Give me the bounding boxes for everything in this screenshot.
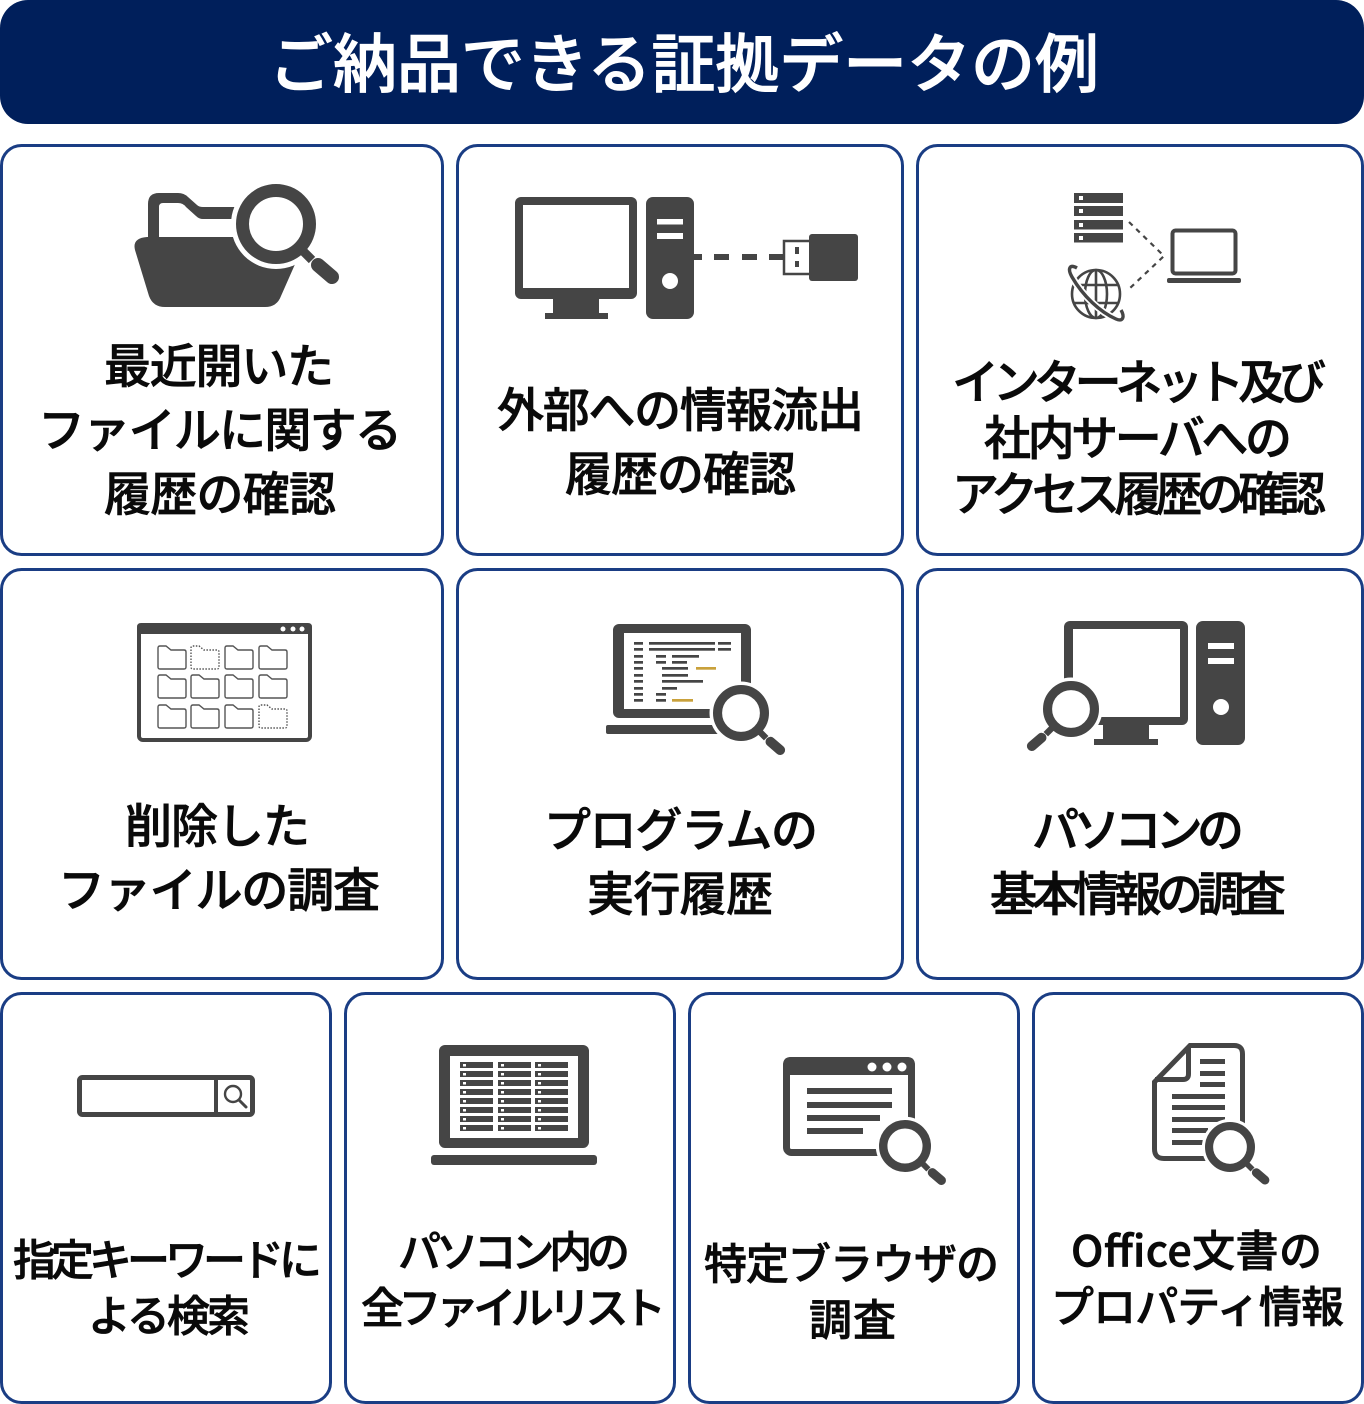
title banner bbox=[0, 0, 1364, 124]
label bbox=[361, 1218, 666, 1336]
panel: browser investigation bbox=[690, 994, 1018, 1402]
panel: keyword search bbox=[2, 994, 330, 1402]
label bbox=[952, 344, 1326, 525]
label: インターネット及び bbox=[952, 344, 1326, 413]
label: アクセス履歴の確認 bbox=[952, 456, 1326, 525]
icon: search box bbox=[80, 1076, 252, 1116]
label: Office文書の bbox=[1071, 1218, 1322, 1280]
panel: internet and server access bbox=[918, 146, 1362, 554]
panel: recently opened files bbox=[2, 146, 442, 554]
label: 履歴の確認 bbox=[565, 436, 796, 505]
label: プログラムの bbox=[544, 792, 818, 861]
label bbox=[497, 372, 864, 505]
icon: server, globe and laptop bbox=[1070, 193, 1241, 320]
label: 社内サーバへの bbox=[984, 400, 1292, 469]
label: 全ファイルリスト bbox=[361, 1274, 666, 1336]
panel: external data leak bbox=[458, 146, 902, 554]
label: 実行履歴 bbox=[587, 856, 773, 925]
label: 最近開いた bbox=[104, 328, 334, 397]
label: プロパティ情報 bbox=[1051, 1274, 1344, 1336]
label bbox=[1051, 1218, 1344, 1336]
icon: desktop computer with magnifier bbox=[1032, 621, 1245, 746]
icon: folder with magnifier bbox=[134, 179, 332, 307]
panel: PC basic information bbox=[918, 570, 1362, 978]
label: ファイルに関する bbox=[38, 392, 402, 461]
icon: laptop with code and magnifier bbox=[606, 624, 780, 750]
label: 特定ブラウザの bbox=[704, 1230, 999, 1292]
title banner: ご納品できる証拠データの例 bbox=[269, 14, 1099, 106]
label: 基本情報の調査 bbox=[990, 856, 1286, 925]
label: 指定キーワードに bbox=[13, 1226, 322, 1288]
panel: deleted files bbox=[2, 570, 442, 978]
label: パソコンの bbox=[1032, 792, 1244, 861]
label bbox=[990, 792, 1286, 925]
icon: browser window with magnifier bbox=[783, 1057, 941, 1180]
label: 外部への情報流出 bbox=[497, 372, 864, 441]
label: ファイルの調査 bbox=[58, 852, 380, 921]
panel: Office document properties bbox=[1034, 994, 1362, 1402]
label bbox=[58, 788, 380, 921]
panel: full file list bbox=[346, 994, 674, 1402]
label bbox=[38, 328, 402, 525]
panel: program execution history bbox=[458, 570, 902, 978]
icon: laptop with file list bbox=[431, 1045, 597, 1165]
label: 調査 bbox=[809, 1286, 896, 1348]
label: 履歴の確認 bbox=[104, 456, 336, 525]
label: よる検索 bbox=[88, 1282, 250, 1344]
label bbox=[13, 1226, 322, 1344]
icon: window with folders bbox=[137, 623, 312, 740]
icon: desktop computer with USB memory bbox=[515, 197, 858, 319]
label: 削除した bbox=[125, 788, 310, 857]
icon: document with magnifier bbox=[1154, 1046, 1265, 1180]
label bbox=[704, 1230, 999, 1348]
label bbox=[544, 792, 818, 925]
label: パソコン内の bbox=[398, 1218, 630, 1280]
